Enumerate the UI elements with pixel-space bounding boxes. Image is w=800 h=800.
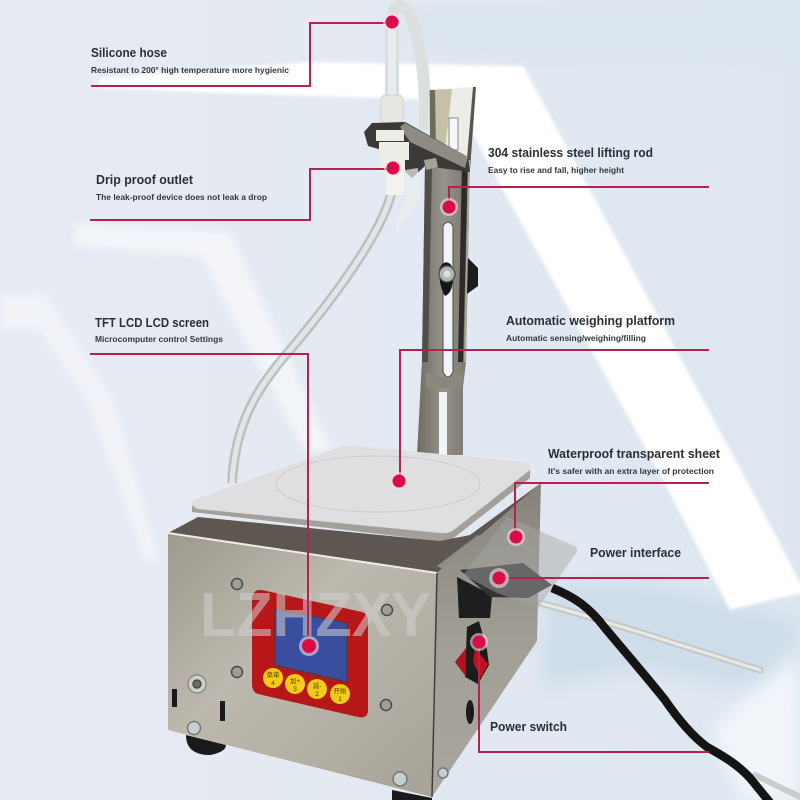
callout: LCD screen — [90, 315, 319, 656]
rocker power switch — [455, 621, 489, 724]
buttons: 3 — [293, 686, 297, 693]
callout: power interface — [489, 545, 709, 588]
callout: weighing platform — [390, 313, 709, 490]
base front panel — [168, 533, 437, 797]
silicone tube behind the machine — [540, 603, 800, 797]
base top surface — [168, 483, 541, 573]
callout: lifting rod — [440, 145, 709, 216]
LCD screen — [275, 609, 347, 682]
callout: lifting rod: Easy to rise and fall, higher height — [488, 165, 624, 175]
callout: drip proof outlet — [90, 159, 402, 220]
callout: silicone hose — [91, 13, 401, 86]
callout: silicone hose: Silicone hose — [91, 45, 167, 60]
power socket block — [457, 577, 492, 618]
callout: weighing platform: Automatic weighing platform — [506, 313, 675, 328]
buttons: 开始 — [334, 686, 347, 695]
front feet — [186, 735, 432, 800]
machine base — [168, 483, 541, 800]
callout: drip proof outlet: Drip proof outlet — [96, 172, 194, 187]
callout: power interface: Power interface — [590, 545, 681, 560]
buttons — [263, 668, 350, 704]
watermark: LZHZXY — [200, 581, 431, 650]
buttons: 4 — [271, 680, 275, 687]
callout: lifting rod: 304 stainless steel lifting rod — [488, 145, 653, 160]
callout: LCD screen: Microcomputer control Settings — [95, 334, 223, 344]
buttons: 2 — [315, 691, 319, 698]
weighing platform — [192, 446, 530, 542]
waterproof transparent sheet — [463, 517, 577, 608]
power plug — [460, 563, 552, 598]
screws and fittings — [172, 578, 448, 786]
callout: waterproof sheet: It's safer with an extra layer of protection — [548, 466, 714, 476]
callout: waterproof sheet: Waterproof transparent sheet — [548, 446, 721, 461]
callout: LCD screen: TFT LCD LCD screen — [95, 315, 209, 330]
outlet bracket and drip proof nozzle — [364, 122, 470, 240]
base side panel — [432, 483, 541, 797]
callout: power switch — [470, 633, 709, 752]
buttons: 1 — [338, 696, 342, 703]
lifting rod — [417, 87, 478, 455]
buttons: 减- — [313, 681, 321, 690]
callout: drip proof outlet: The leak-proof device does not leak a drop — [96, 192, 267, 202]
callout: waterproof sheet — [507, 446, 721, 546]
control panel with LCD screen — [252, 590, 368, 717]
buttons: 菜单 — [266, 670, 280, 679]
silicone hose — [232, 6, 425, 483]
callout: weighing platform: Automatic sensing/weighing/filling — [506, 333, 646, 343]
callout: power switch: Power switch — [490, 719, 567, 734]
power cord — [552, 588, 772, 800]
buttons: 加+ — [290, 676, 300, 685]
callout: silicone hose: Resistant to 200° high temperature more hygienic — [91, 65, 289, 75]
ventilation grille — [437, 535, 500, 575]
